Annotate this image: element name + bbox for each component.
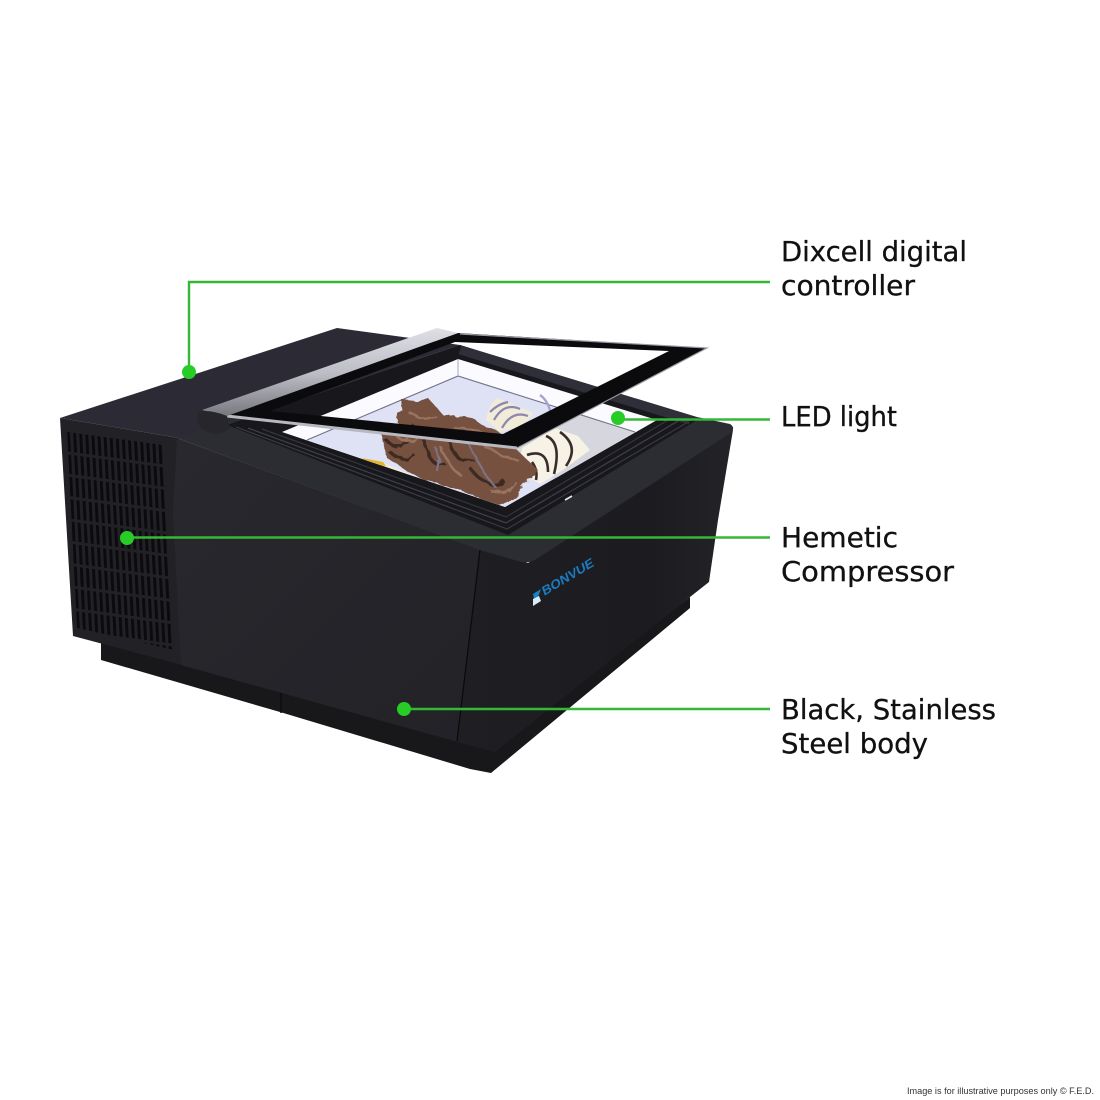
logo: Bonvue: BONVUE xyxy=(540,555,596,599)
illuminated interior xyxy=(282,359,657,507)
compressor housing xyxy=(60,328,460,665)
callout: Hemetic Compressor: Hemetic xyxy=(781,522,898,554)
ice cream tubs xyxy=(362,395,590,507)
glass lid xyxy=(227,333,707,448)
front panel xyxy=(173,438,481,742)
white swirl gelato xyxy=(486,395,590,484)
logo: Bonvue xyxy=(533,555,596,606)
callout: LED light xyxy=(611,401,897,433)
product: black display freezer xyxy=(60,328,733,773)
callout: Dixcell digital controller xyxy=(182,236,967,379)
cabinet top surface xyxy=(177,345,733,562)
callout: Black, Stainless Steel body: Steel body xyxy=(781,728,928,760)
callout: Dixcell digital controller: Dixcell digital xyxy=(781,236,967,268)
callout: Black, Stainless Steel body xyxy=(397,694,996,760)
callout: Black, Stainless Steel body: Black, Stainless xyxy=(781,694,996,726)
right side panel xyxy=(457,430,733,752)
callout: Hemetic Compressor xyxy=(120,522,955,588)
base plinth xyxy=(101,597,690,773)
lemon gelato xyxy=(362,458,416,478)
chocolate gelato xyxy=(383,400,538,507)
lid hinge bar xyxy=(197,328,458,434)
callout: Dixcell digital controller: controller xyxy=(781,270,916,302)
footer disclaimer: Image is for illustrative purposes only © F.E.D. xyxy=(907,1086,1094,1096)
callout: LED light: LED light xyxy=(781,401,897,433)
display opening frame xyxy=(227,345,697,535)
infographic canvas xyxy=(60,240,1094,1096)
callout: Hemetic Compressor: Compressor xyxy=(781,556,955,588)
